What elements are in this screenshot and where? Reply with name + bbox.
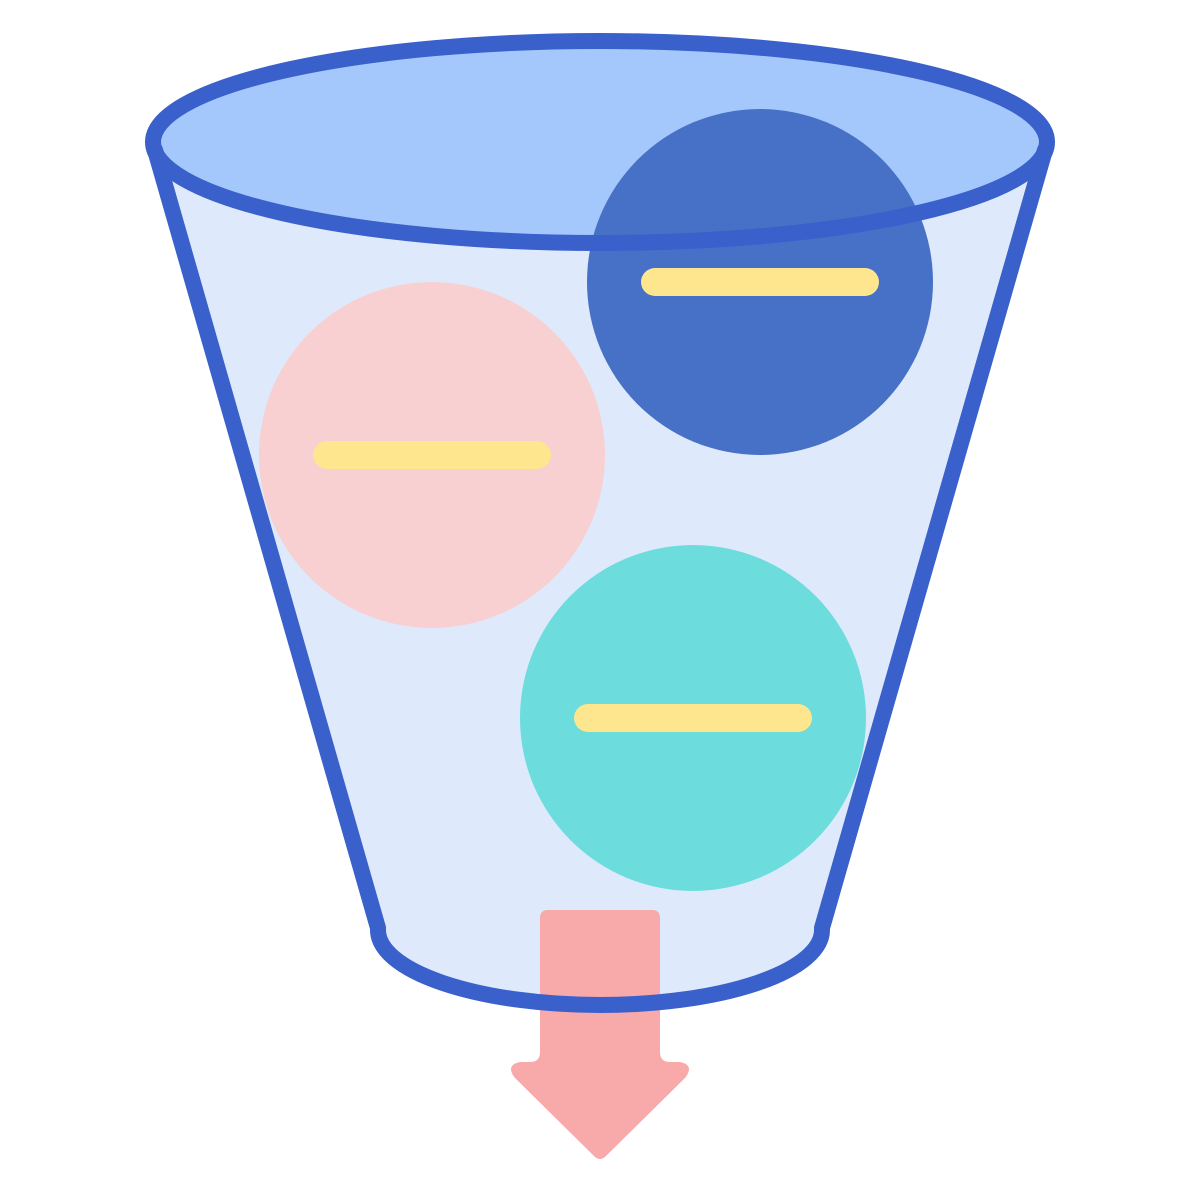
circle: pink with bar xyxy=(259,282,605,628)
arrow: down xyxy=(511,910,689,1159)
funnel outline xyxy=(153,41,1047,1005)
circle: teal with bar xyxy=(520,545,866,891)
circle: dark blue with bar xyxy=(587,109,933,455)
funnel body xyxy=(153,41,1047,1005)
